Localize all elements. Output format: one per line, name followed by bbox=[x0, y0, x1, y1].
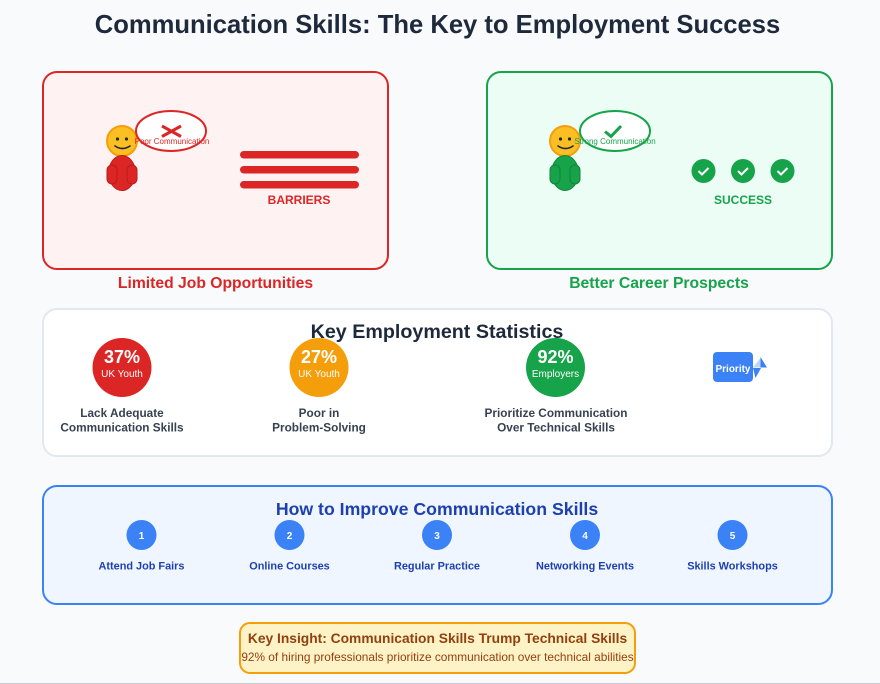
label: barriers: BARRIERS bbox=[268, 193, 330, 207]
step 4: 4 bbox=[582, 531, 588, 542]
icon: barrier bars bbox=[240, 151, 359, 188]
step 3: Regular Practice bbox=[394, 560, 480, 572]
speech bubble: strong communication: Strong Communication bbox=[574, 137, 656, 146]
step 5: Skills Workshops bbox=[687, 560, 778, 572]
step 2: 2 bbox=[287, 531, 293, 542]
stat: 92%: Over Technical Skills bbox=[497, 420, 615, 434]
step 1: 1 bbox=[139, 531, 145, 542]
heading: key employment statistics: Key Employment Statistics bbox=[311, 321, 563, 343]
step 5: 5 bbox=[730, 531, 736, 542]
stat: 27% bbox=[272, 338, 366, 434]
icon: person with smiley, green bbox=[550, 126, 580, 190]
step 3: 3 bbox=[434, 531, 440, 542]
stat: 37%: 37% bbox=[104, 347, 140, 367]
caption: limited job opportunities: Limited Job Opportunities bbox=[118, 275, 313, 292]
caption: better career prospects: Better Career Prospects bbox=[569, 275, 749, 292]
panel: how to improve bbox=[43, 486, 832, 604]
panel: better career prospects bbox=[487, 72, 832, 269]
step 4: Networking Events bbox=[536, 560, 634, 572]
icon: priority badge bbox=[713, 352, 767, 382]
stat: 27%: UK Youth bbox=[298, 369, 340, 380]
stat: 37%: Communication Skills bbox=[60, 420, 184, 434]
stat: 37% bbox=[60, 338, 184, 434]
heading: how to improve: How to Improve Communication Skills bbox=[276, 499, 598, 519]
stat: 92%: Employers bbox=[532, 369, 579, 380]
stat: 92% bbox=[485, 338, 627, 434]
step 2 bbox=[249, 520, 330, 572]
stat: 37%: Lack Adequate bbox=[80, 406, 164, 420]
stat: 92%: Prioritize Communication bbox=[485, 406, 627, 420]
step 2: Online Courses bbox=[249, 560, 330, 572]
step 1 bbox=[99, 520, 184, 572]
stat: 27%: 27% bbox=[301, 347, 337, 367]
title: Communication Skills: The Key to Employment Success bbox=[95, 11, 780, 39]
stat: 27%: Poor in bbox=[299, 406, 339, 420]
step 4 bbox=[536, 520, 634, 572]
icon: priority badge: Priority bbox=[715, 364, 751, 375]
speech bubble: strong communication bbox=[574, 111, 656, 151]
speech bubble: poor communication bbox=[135, 111, 209, 151]
panel: key employment statistics bbox=[43, 309, 832, 456]
callout: key insight bbox=[240, 623, 635, 673]
step 3 bbox=[394, 520, 480, 572]
speech bubble: poor communication: Poor Communication bbox=[135, 137, 209, 146]
icon: success checks bbox=[692, 159, 794, 183]
stat: 92%: 92% bbox=[537, 347, 574, 367]
stat: 37%: UK Youth bbox=[101, 369, 143, 380]
step 5 bbox=[687, 520, 778, 572]
callout: key insight: 92% of hiring professionals prioritize communication over technical abilities bbox=[241, 650, 634, 664]
callout: key insight: Key Insight: Communication Skills Trump Technical Skills bbox=[248, 631, 627, 646]
stat: 27%: Problem-Solving bbox=[272, 420, 366, 434]
panel: limited job opportunities bbox=[43, 72, 388, 269]
icon: person with smiley, red bbox=[107, 126, 137, 190]
step 1: Attend Job Fairs bbox=[99, 560, 184, 572]
label: success: SUCCESS bbox=[714, 193, 772, 207]
